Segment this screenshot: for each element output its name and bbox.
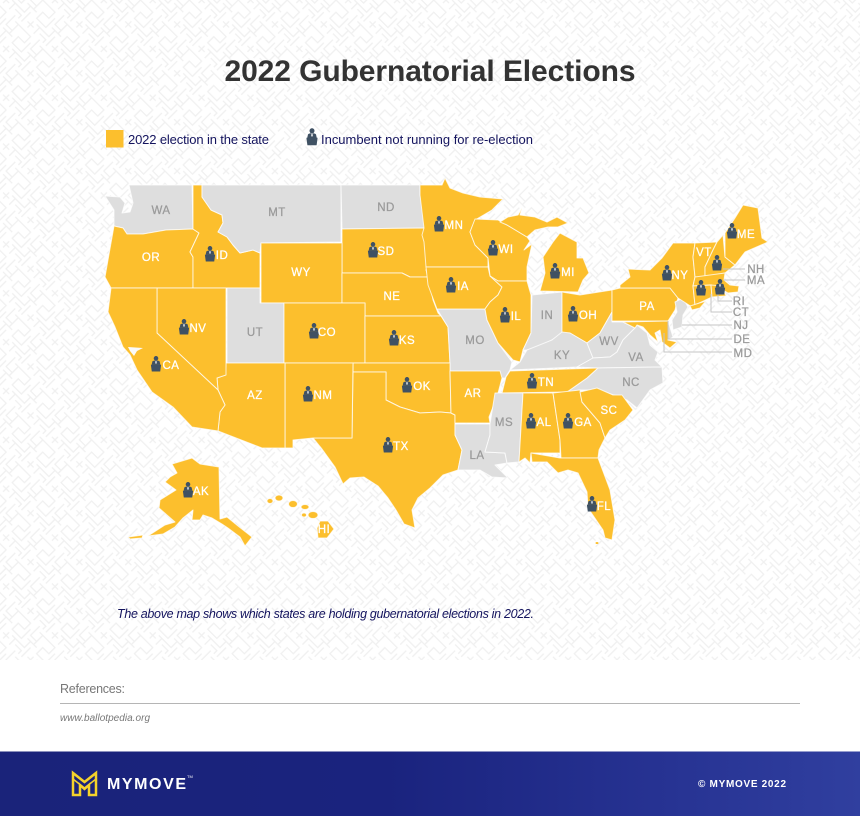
state: AK Aleutians [128,535,143,539]
labels without incumbent icon: WA [151,205,171,217]
legend icon: incumbent podium [306,128,318,145]
references panel [0,660,860,752]
labels without incumbent icon [142,202,712,536]
state: ND [341,185,427,229]
state: VT [693,242,717,277]
labels without incumbent icon: MS [495,417,513,429]
state: MO [437,309,512,378]
state: KY [510,332,593,370]
labels with incumbent icon: MN [445,220,463,232]
labels with incumbent icon: KS [399,335,415,347]
labels without incumbent icon: NC [622,377,640,389]
state: NJ [672,298,688,330]
labels with incumbent icon: OK [413,381,431,393]
state: MI lower peninsula [540,233,589,292]
state: CT [693,285,712,305]
labels without incumbent icon: ND [377,202,395,214]
labels without incumbent icon: HI [318,524,330,536]
logo wordmark: MYMOVE [107,776,186,793]
legend [106,128,533,148]
state: NC [567,367,663,408]
labels with incumbent icon: IA [457,281,469,293]
labels with incumbent icon: WI [498,244,514,256]
state: UT [227,288,284,363]
labels with incumbent icon: TN [538,377,554,389]
labels without incumbent icon: VT [696,247,712,259]
labels without incumbent icon: WY [291,267,311,279]
outside labels for small states: NJ [733,320,749,332]
footer bar [0,752,860,816]
state: AZ [217,363,285,448]
state: SD [342,228,428,277]
labels with incumbent icon: NV [190,323,206,335]
state: IL [485,276,531,362]
outside labels for small states [733,264,765,360]
state: CO [284,303,365,363]
caption: The above map shows which states are holding gubernatorial elections in 2022. [117,607,534,621]
state: OH [562,290,612,343]
state: NH [705,235,735,277]
state: OR [105,226,199,288]
labels with incumbent icon: AK [193,486,209,498]
labels without incumbent icon: AR [465,388,481,400]
state: PA [612,288,678,321]
state: SC [580,388,633,438]
state: ID [190,185,260,288]
outside labels for small states: MD [734,348,752,360]
state: WV [587,312,635,358]
state: MI upper peninsula [500,208,568,237]
state: WI [470,219,532,281]
decorative bay cutout [128,347,143,356]
labels without incumbent icon: LA [469,450,485,462]
state: CA [108,288,225,431]
labels with incumbent icon: NM [314,390,332,402]
labels with incumbent icon: AL [536,417,552,429]
outside labels for small states: MA [747,275,765,287]
labels without incumbent icon: MO [465,335,485,347]
labels with incumbent icon: SD [378,246,394,258]
labels without incumbent icon: SC [601,405,617,417]
state: IA [426,267,502,309]
state: NE [342,273,441,316]
labels with incumbent icon: TX [393,441,409,453]
trademark: TM [187,774,193,779]
outside labels for small states: RI [733,296,745,308]
state: AL [519,393,560,463]
labels without incumbent icon: KY [554,350,570,362]
state: TX [313,372,462,528]
labels with incumbent icon: CO [318,327,336,339]
labels with incumbent icon: NY [672,270,688,282]
outside labels for small states: DE [734,334,750,346]
labels with incumbent icon [163,220,755,513]
state: WY [261,243,342,303]
state: OK [353,363,451,413]
labels with incumbent icon: IL [511,311,521,323]
labels without incumbent icon: AZ [247,390,263,402]
labels with incumbent icon: FL [597,501,611,513]
title: 2022 Gubernatorial Elections [224,55,636,88]
state: HI [267,495,334,538]
legend label: election state: 2022 election in the state [128,132,269,147]
outside labels for small states: CT [733,307,749,319]
reference link: www.ballotpedia.org [60,713,150,724]
podium icons and state labels [142,202,765,536]
labels without incumbent icon: OR [142,252,160,264]
state: AK [148,458,252,546]
labels without incumbent icon: VA [628,352,644,364]
state: DE [668,321,673,340]
state: MD [623,321,677,348]
state: MT [202,185,341,253]
references heading: References: [60,682,125,696]
logo mark [73,773,96,795]
state: MS [485,393,523,463]
labels without incumbent icon: MT [268,207,286,219]
state: GA [553,390,605,458]
labels with incumbent icon: ME [737,229,755,241]
labels without incumbent icon: NE [384,291,400,303]
state: KS [365,316,450,363]
state: MA [693,273,739,293]
outside labels for small states: NH [747,264,765,276]
labels with incumbent icon: ID [216,250,228,262]
incumbent icons on map [151,216,737,512]
state: ME [725,205,768,265]
labels with incumbent icon: MI [561,267,575,279]
labels with incumbent icon: CA [163,360,179,372]
legend swatch: election state [106,130,124,148]
state: TN [502,368,598,393]
state: WA [105,185,193,234]
legend label: incumbent: Incumbent not running for re-election [321,132,533,147]
state: AR [450,371,502,423]
state: NY Long Island [690,301,706,310]
leader lines: small states [664,269,745,352]
state: RI [711,285,726,297]
state: MN [420,178,503,267]
state: LA [455,424,508,478]
decorative Florida keys [596,542,598,544]
state: FL [531,453,615,540]
state: NV [157,288,226,390]
labels with incumbent icon: GA [574,417,592,429]
state: NY [620,243,695,307]
state: IN [523,292,562,350]
labels without incumbent icon: UT [247,327,263,339]
state: VA [577,325,662,368]
map of US states [105,178,768,546]
copyright: © MYMOVE 2022 [698,779,786,790]
labels without incumbent icon: IN [541,310,553,322]
labels with incumbent icon: OH [579,310,597,322]
labels without incumbent icon: WV [599,336,619,348]
state: NM [285,363,353,448]
labels without incumbent icon: PA [639,301,655,313]
